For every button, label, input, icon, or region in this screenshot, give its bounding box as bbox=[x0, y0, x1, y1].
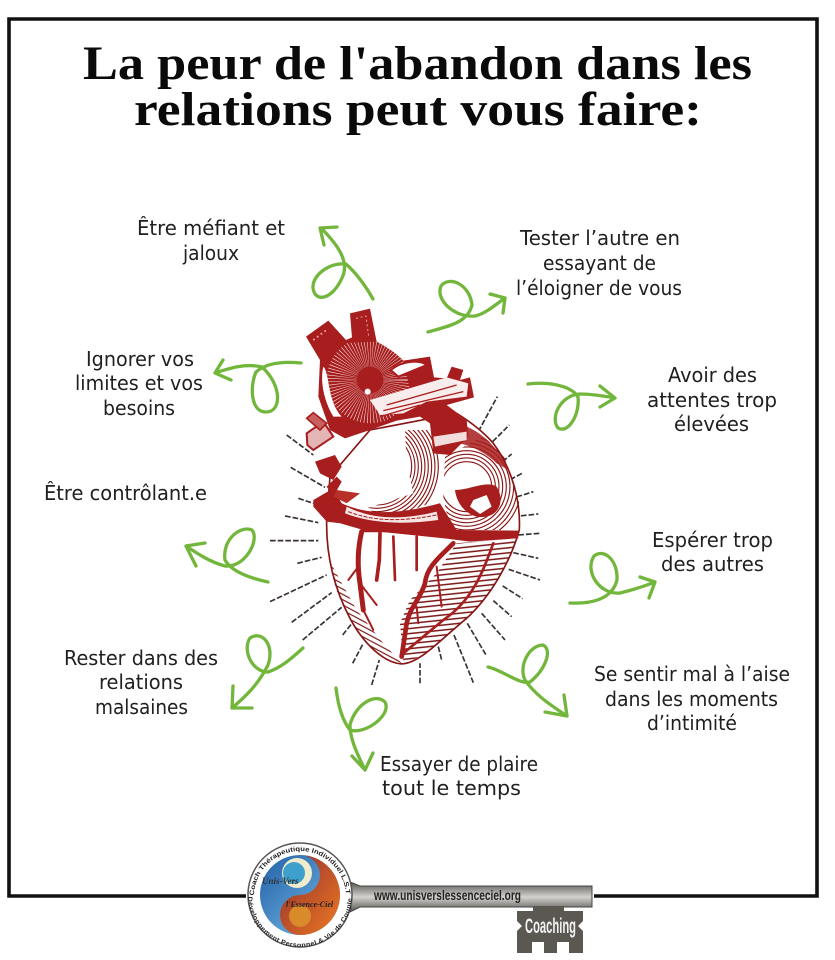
label: plaire: Essayer de plaire bbox=[380, 752, 538, 776]
aorta and pulmonary artery bbox=[306, 309, 474, 455]
arrow: contrôlant bbox=[186, 529, 268, 582]
label: être méfiant: Être méfiant et bbox=[137, 215, 285, 240]
arrow: intimité bbox=[488, 645, 567, 716]
title bbox=[83, 37, 752, 136]
label: ignorer bbox=[75, 347, 203, 420]
label: espérer: Espérer trop bbox=[652, 528, 773, 552]
arrow: être méfiant bbox=[313, 227, 373, 299]
right chamber curved shading bbox=[443, 438, 520, 530]
label: rester: Rester dans des bbox=[64, 646, 218, 670]
label: contrôlant: Être contrôlant.e bbox=[44, 480, 207, 505]
label: ignorer: Ignorer vos bbox=[86, 347, 194, 371]
aorta white radial streaks bbox=[342, 352, 398, 408]
round badge: Coach Thérapeutique Individuel L.S.T bbox=[250, 846, 350, 896]
logo: key with website bbox=[247, 842, 592, 953]
label: rester: malsaines bbox=[95, 695, 188, 719]
key bit: coaching: Coaching bbox=[525, 915, 576, 938]
label: tester: Tester l’autre en bbox=[519, 226, 680, 250]
label: être méfiant bbox=[137, 215, 285, 265]
label: ignorer: besoins bbox=[103, 396, 175, 420]
website: www.unisverslessenceciel.org bbox=[373, 887, 521, 903]
label: intimité bbox=[594, 662, 790, 735]
title: relations peut vous faire: bbox=[134, 83, 702, 136]
label: plaire: tout le temps bbox=[382, 776, 521, 800]
label: intimité: Se sentir mal à l’aise bbox=[594, 662, 790, 686]
coronary arteries bbox=[348, 531, 493, 657]
key shaft bbox=[350, 882, 592, 912]
chamber curved shading bbox=[368, 430, 439, 512]
label: tester: l’éloigner de vous bbox=[516, 276, 682, 300]
lower vessel band bbox=[313, 488, 518, 542]
round badge bbox=[247, 842, 353, 948]
label: intimité: d’intimité bbox=[647, 711, 737, 735]
label: rester bbox=[64, 646, 218, 719]
label: intimité: dans les moments bbox=[605, 687, 778, 711]
key bit: coaching bbox=[517, 906, 583, 953]
label: être méfiant: jaloux bbox=[182, 241, 239, 265]
label: tester: essayant de bbox=[543, 251, 656, 275]
arrow: plaire bbox=[336, 688, 386, 770]
round badge: Unis-Vers bbox=[262, 876, 299, 886]
label: plaire bbox=[380, 752, 538, 800]
arrow: espérer bbox=[570, 553, 655, 603]
arrow: tester bbox=[428, 281, 505, 332]
title: La peur de l'abandon dans les bbox=[83, 37, 752, 90]
arrow: ignorer bbox=[215, 360, 301, 412]
label: attentes bbox=[647, 363, 777, 436]
round badge: Développement Personnel & Vie de Couple bbox=[248, 896, 352, 948]
arrow: relations malsaines bbox=[232, 636, 303, 708]
label: attentes: élevées bbox=[674, 412, 749, 436]
label: espérer: des autres bbox=[661, 552, 764, 576]
label: attentes: attentes trop bbox=[647, 388, 777, 412]
label: espérer bbox=[652, 528, 773, 576]
sunburst rays bbox=[270, 397, 540, 685]
lower hatching bbox=[400, 538, 517, 662]
label: rester: relations bbox=[99, 670, 183, 694]
arrow: attentes bbox=[528, 383, 615, 429]
label: ignorer: limites et vos bbox=[75, 371, 203, 395]
label: tester bbox=[516, 226, 682, 300]
heart body bbox=[327, 413, 519, 664]
round badge: l'Essence-Ciel bbox=[286, 900, 334, 909]
right chamber crescent bbox=[455, 484, 501, 517]
illustration: anatomical heart bbox=[270, 309, 540, 685]
label: attentes: Avoir des bbox=[668, 363, 757, 387]
